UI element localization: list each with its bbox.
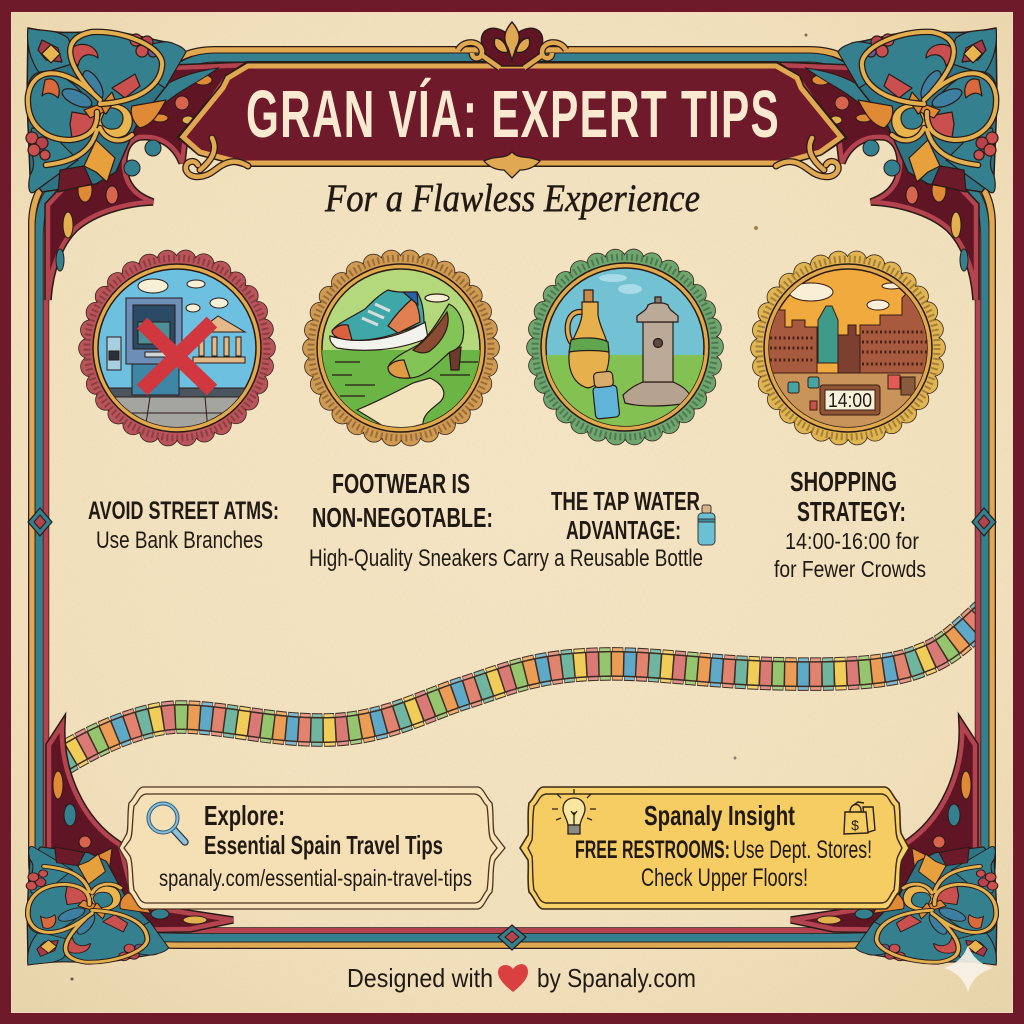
clock (820, 385, 880, 415)
fountain (623, 297, 690, 406)
high heel (388, 304, 464, 378)
insight callout: Spanaly Insight (644, 800, 795, 831)
footer credit (347, 963, 696, 993)
subtitle: For a Flawless Experience (324, 177, 700, 220)
tip 1 text (88, 497, 279, 554)
tip 4 text: for Fewer Crowds (774, 556, 926, 582)
buildings (765, 310, 817, 373)
medallion: avoid street ATMs (87, 258, 267, 438)
explore callout: Explore: (204, 800, 285, 831)
icon: shopping bag with money (844, 802, 875, 834)
sparkle watermark (944, 945, 993, 992)
footer credit: Designed with (347, 963, 493, 993)
clouds (138, 279, 228, 312)
tip 2 heading: FOOTWEAR IS (332, 468, 470, 499)
tip 1 text: Use Bank Branches (96, 527, 263, 554)
tip 4 text (774, 466, 926, 582)
tip 4 text: STRATEGY: (797, 496, 906, 527)
top right corner ornament (776, 28, 998, 300)
banner scroll left (186, 138, 838, 177)
ATM (132, 364, 179, 395)
icon: reusable bottle (698, 505, 715, 545)
plaza (773, 372, 923, 427)
footer credit: by Spanaly.com (537, 963, 696, 993)
path (357, 378, 444, 432)
tip 3 heading (551, 486, 700, 545)
bottom right corner ornament (791, 725, 998, 965)
insight callout: Check Upper Floors! (641, 864, 808, 892)
bank (193, 316, 245, 363)
medallion: shopping strategy (759, 259, 937, 437)
grass strokes (332, 362, 478, 396)
tip 2 heading: NON-NEGOTABLE: (312, 502, 493, 533)
shopping bags (788, 382, 799, 393)
title banner (182, 65, 842, 177)
bottom left corner ornament (26, 725, 233, 965)
icon: magnifier (148, 804, 185, 842)
insight callout (520, 787, 909, 909)
insight callout: FREE RESTROOMS: (575, 836, 730, 864)
explore callout: Essential Spain Travel Tips (204, 830, 443, 860)
decorative bead chain (40, 610, 990, 775)
top left corner ornament (26, 28, 248, 300)
tip 3 heading: ADVANTAGE: (566, 515, 681, 545)
icon: shopping bag with money: $ (851, 817, 859, 833)
jug (568, 290, 609, 388)
sneaker (330, 290, 428, 350)
insight callout: Use Dept. Stores! (733, 836, 872, 864)
medallion: shopping strategy: 14:00 (828, 390, 872, 412)
tip 3 heading: THE TAP WATER (551, 486, 700, 516)
medallion: tap water (535, 257, 715, 437)
banner bottom centre flourish (484, 152, 540, 178)
tip 1 text: AVOID STREET ATMS: (88, 497, 279, 525)
red cross (142, 322, 212, 390)
tip 4 text: SHOPPING (790, 466, 897, 497)
tips 2 and 3 body text: High-Quality Sneakers Carry a Reusable Bottle (309, 545, 703, 572)
explore callout: spanaly.com/essential-spain-travel-tips (159, 865, 472, 891)
tip 2 heading (312, 468, 493, 533)
bottle in scene (593, 371, 620, 419)
top centre fleur ornament (458, 22, 566, 68)
tip 4 text: 14:00-16:00 for (785, 528, 919, 554)
icon: heart (498, 964, 528, 992)
icon: light bulb (552, 789, 596, 834)
medallion: footwear (311, 258, 491, 438)
poster (107, 337, 121, 370)
explore callout (119, 787, 505, 909)
